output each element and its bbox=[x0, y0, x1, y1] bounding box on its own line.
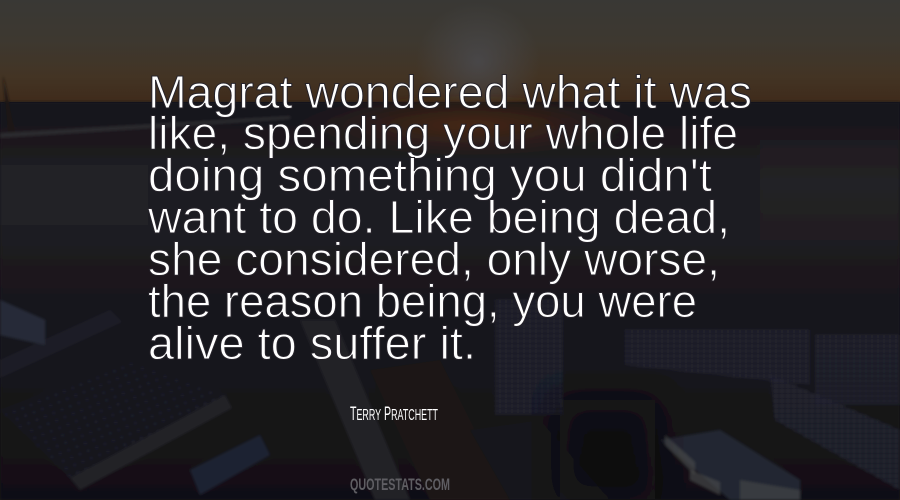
quote text: the reason being, you were bbox=[148, 275, 697, 327]
background: dusk sky bbox=[0, 0, 900, 122]
quote text: she considered, only worse, bbox=[148, 233, 720, 285]
author: TERRY PRATCHETT bbox=[350, 404, 438, 425]
quote text: want to do. Like being dead, bbox=[147, 191, 730, 243]
site credit: QUOTESTATS.COM bbox=[350, 475, 450, 494]
quote text: Magrat wondered what it was bbox=[148, 66, 752, 118]
quote text: like, spending your whole life bbox=[148, 107, 738, 159]
quote text bbox=[147, 66, 752, 369]
quote text: doing something you didn't bbox=[148, 149, 712, 201]
quote text: alive to suffer it. bbox=[148, 317, 476, 369]
